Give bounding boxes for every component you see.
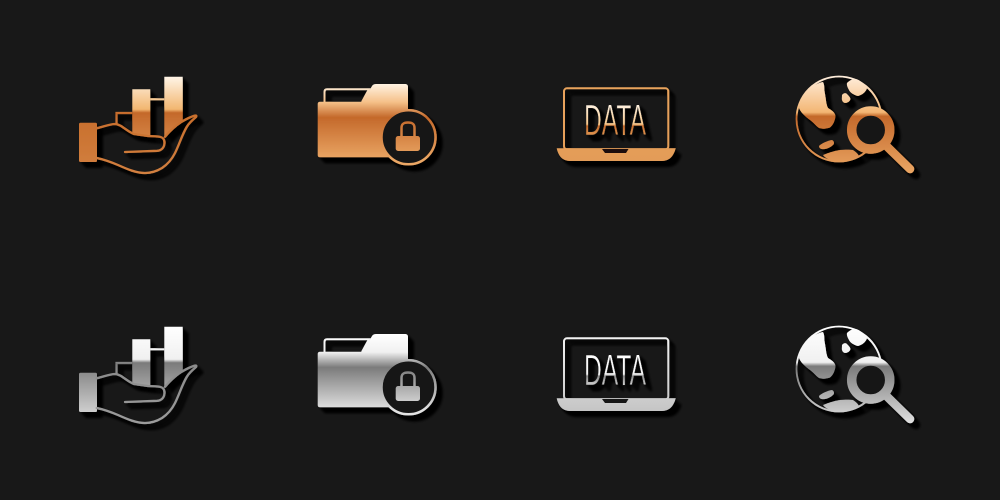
chart connectors xyxy=(116,349,164,374)
icon: hand holding bar chart xyxy=(79,77,196,173)
chart bars xyxy=(132,77,183,138)
icon: globe with magnifier xyxy=(796,326,910,419)
DATA label: DATA xyxy=(584,346,646,395)
icon: laptop with DATA xyxy=(557,338,676,411)
DATA label: DATA xyxy=(584,96,646,145)
globe outline xyxy=(796,76,882,162)
padlock body xyxy=(396,386,420,401)
chart bars xyxy=(132,327,183,388)
hand outline xyxy=(97,365,196,423)
padlock body xyxy=(396,136,420,151)
padlock badge xyxy=(382,110,436,164)
trackpad notch xyxy=(602,399,628,403)
laptop screen xyxy=(564,88,668,149)
laptop screen xyxy=(564,338,668,399)
icon: hand holding bar chart xyxy=(79,327,196,423)
folder back tab xyxy=(324,89,369,102)
continents xyxy=(799,329,867,412)
laptop base xyxy=(557,148,676,161)
magnifier handle xyxy=(887,146,910,169)
folder body xyxy=(318,334,408,407)
cuff xyxy=(79,373,97,412)
trackpad notch xyxy=(602,149,628,153)
continents xyxy=(799,79,867,162)
magnifier handle xyxy=(887,396,910,419)
hand outline xyxy=(97,115,196,173)
icon: folder with padlock xyxy=(318,334,436,414)
laptop base xyxy=(557,398,676,411)
globe outline xyxy=(796,326,882,412)
cuff xyxy=(79,123,97,162)
padlock badge xyxy=(382,360,436,414)
magnifier ring xyxy=(852,111,890,149)
gold icon row xyxy=(79,76,910,173)
folder body xyxy=(318,84,408,157)
icon: folder with padlock xyxy=(318,84,436,164)
padlock shackle xyxy=(402,122,414,137)
silver icon row xyxy=(79,326,910,423)
icon: laptop with DATA xyxy=(557,88,676,161)
folder back tab xyxy=(324,339,369,352)
icon: globe with magnifier xyxy=(796,76,910,169)
chart connectors xyxy=(116,99,164,124)
magnifier ring xyxy=(852,361,890,399)
padlock shackle xyxy=(402,372,414,387)
